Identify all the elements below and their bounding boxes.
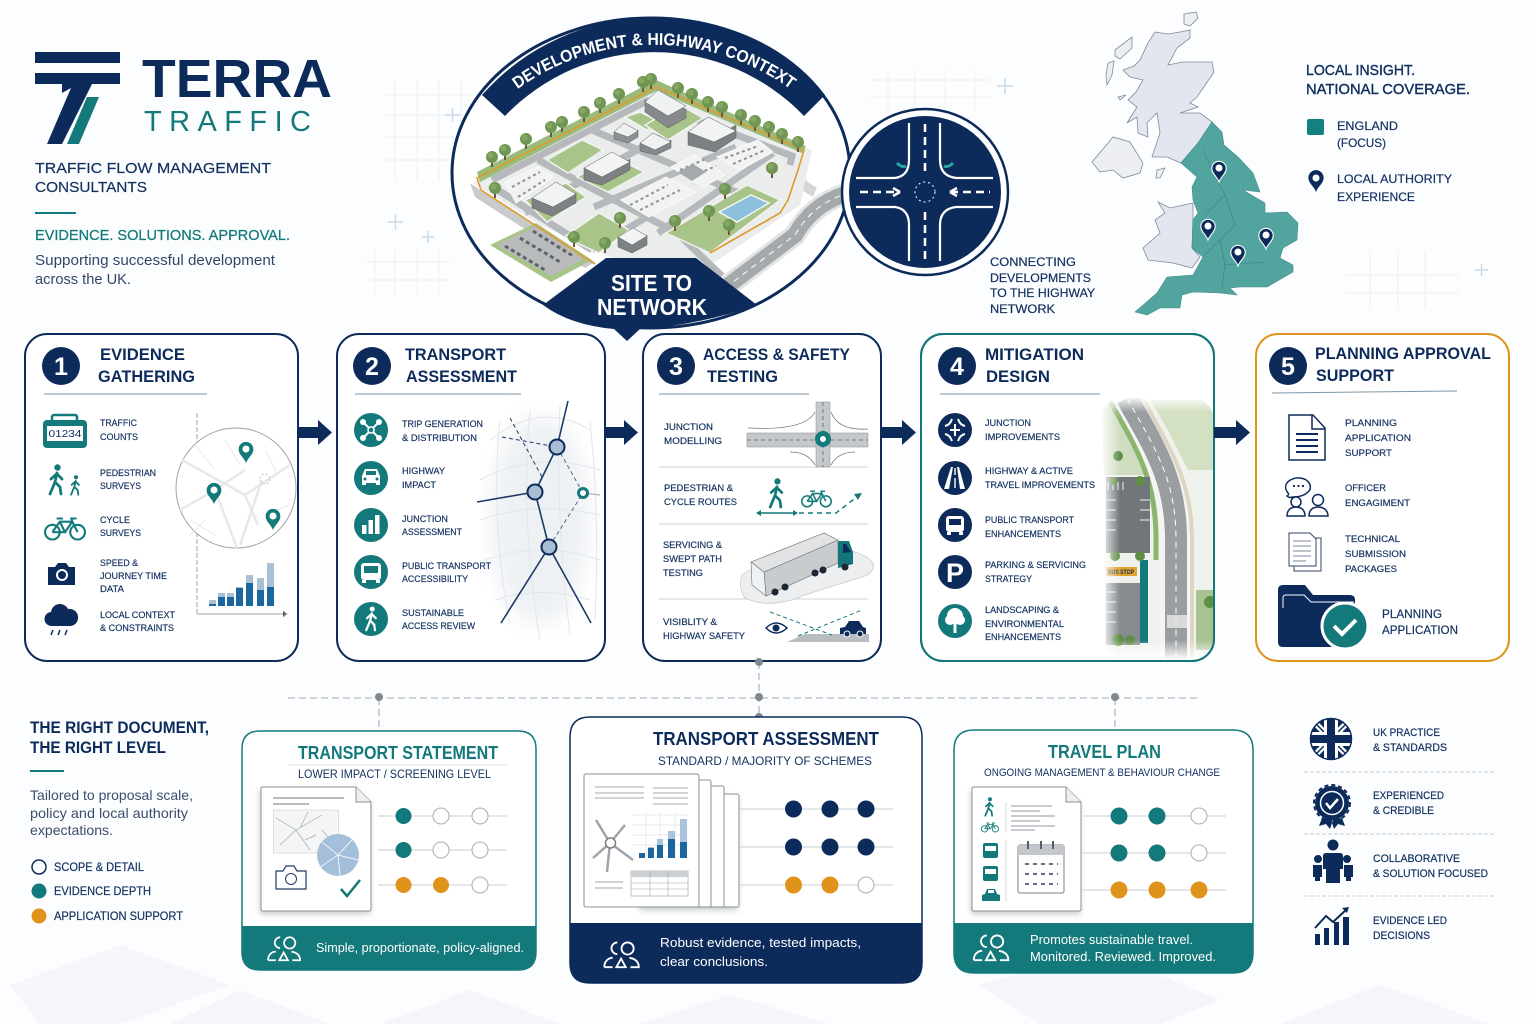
item: landscaping: ENHANCEMENTS	[985, 632, 1061, 642]
assessment footer: Robust evidence, tested impacts,	[660, 935, 861, 950]
map heading	[1306, 63, 1470, 98]
icon: parking	[938, 555, 972, 589]
item: public transport accessibility: PUBLIC TRANSPORT	[402, 561, 491, 571]
item: sustainable access: SUSTAINABLE	[402, 608, 464, 618]
map heading: LOCAL INSIGHT.	[1306, 63, 1415, 79]
heading 3: ACCESS & SAFETY	[703, 345, 851, 364]
badge 5: 5	[1281, 353, 1295, 381]
item: local context: LOCAL CONTEXT	[100, 610, 175, 620]
logo: Terra Traffic	[35, 49, 332, 144]
item: planning application	[1382, 607, 1458, 637]
panel: transport assessment	[570, 717, 922, 983]
badge 4: 4	[950, 353, 964, 381]
Wales	[1143, 202, 1200, 268]
assessment heading: TRANSPORT ASSESSMENT	[653, 729, 879, 749]
site roads	[490, 101, 792, 276]
document level intro text: policy and local authority	[30, 805, 188, 821]
icon: bicycle	[45, 518, 85, 540]
item: trip generation	[402, 419, 483, 443]
assessment footer	[570, 923, 922, 983]
Northern Ireland	[1092, 137, 1143, 178]
travel plan heading: ONGOING MANAGEMENT & BEHAVIOUR CHANGE	[984, 767, 1220, 779]
item: local context	[100, 610, 175, 633]
statement document	[261, 787, 371, 911]
item: pedestrian surveys: PEDESTRIAN	[100, 468, 156, 478]
site boundary	[477, 87, 804, 253]
wordmark	[142, 49, 332, 138]
item: planning application: PLANNING	[1382, 607, 1442, 621]
tagline: EVIDENCE. SOLUTIONS. APPROVAL.	[35, 228, 290, 244]
item: trip generation: TRIP GENERATION	[402, 419, 483, 429]
buildings	[532, 90, 736, 253]
bar chart	[209, 563, 274, 606]
item: technical submission packages: PACKAGES	[1345, 564, 1397, 574]
rating legend: APPLICATION SUPPORT	[54, 909, 184, 923]
pool	[719, 195, 769, 222]
item: speed and journey time: JOURNEY TIME	[100, 571, 167, 581]
connector lines	[288, 658, 1198, 731]
item: visibility and highway safety: VISIBLITY &	[663, 617, 717, 627]
item: junction improvements: IMPROVEMENTS	[985, 432, 1060, 442]
decorative grid accents	[365, 70, 1488, 308]
item: junction modelling	[664, 422, 722, 446]
document level intro heading: THE RIGHT DOCUMENT,	[30, 719, 209, 737]
icon: highway	[938, 461, 972, 495]
item: planning application support: PLANNING	[1345, 418, 1397, 428]
item: local context: & CONSTRAINTS	[100, 623, 174, 633]
company descriptor: TRAFFIC FLOW MANAGEMENT	[35, 160, 271, 177]
heading 1: GATHERING	[98, 367, 195, 386]
England	[1135, 122, 1298, 315]
badge 5	[1269, 347, 1307, 385]
item: highway impact: HIGHWAY	[402, 466, 445, 476]
heading 2	[355, 345, 521, 394]
item: highway impact	[402, 466, 445, 490]
travel plan document	[972, 787, 1081, 911]
item: landscaping: LANDSCAPING &	[985, 605, 1059, 615]
statement ratings	[378, 808, 507, 893]
item: junction improvements: JUNCTION	[985, 418, 1031, 428]
panel: travel plan	[954, 730, 1253, 973]
icon: walker	[354, 602, 388, 636]
company descriptor	[35, 160, 271, 214]
connecting caption: DEVELOPMENTS	[990, 271, 1091, 285]
wordmark: TERRA	[142, 49, 332, 109]
junction diagram	[747, 402, 868, 467]
card 4: mitigation design	[921, 334, 1216, 661]
item: technical submission packages: SUBMISSION	[1345, 549, 1406, 559]
item: pedestrian and cycle routes: CYCLE ROUTES	[664, 497, 737, 507]
badge 2: 2	[365, 353, 379, 381]
connecting caption	[990, 255, 1095, 316]
heading 3	[659, 345, 851, 394]
rating legend: SCOPE & DETAIL	[54, 860, 144, 874]
icon: union flag	[1310, 718, 1352, 760]
arrow	[1214, 420, 1250, 445]
icon: parking: P	[946, 558, 964, 588]
item: collaborative: & SOLUTION FOCUSED	[1373, 868, 1488, 880]
item: pedestrian surveys	[100, 468, 156, 491]
item: landscaping: ENVIRONMENTAL	[985, 619, 1064, 629]
icon: approved folder	[1278, 585, 1368, 649]
item: pedestrian and cycle routes: PEDESTRIAN &	[664, 483, 733, 493]
item: traffic counts	[100, 418, 138, 442]
supporting statement	[35, 252, 276, 288]
assessment ratings	[740, 800, 893, 894]
logo mark	[35, 52, 120, 144]
heading 5	[1272, 344, 1491, 393]
travel plan ratings	[1083, 808, 1226, 898]
item: servicing and swept path: SERVICING &	[663, 540, 722, 550]
map legend: LOCAL AUTHORITY	[1337, 172, 1452, 186]
connecting caption: NETWORK	[990, 302, 1055, 316]
item: speed and journey time: SPEED &	[100, 558, 138, 568]
travel plan footer: Monitored. Reviewed. Improved.	[1030, 949, 1216, 964]
document level intro heading	[30, 719, 209, 772]
icon: bus	[354, 555, 388, 589]
rating legend: EVIDENCE DEPTH	[54, 884, 151, 898]
item: public transport enhancements: ENHANCEMENTS	[985, 529, 1061, 539]
item: servicing and swept path: TESTING	[663, 568, 703, 578]
banner: site to network	[543, 258, 757, 341]
swept path truck	[741, 533, 873, 603]
aerial road plan	[1100, 396, 1216, 660]
arrow	[298, 420, 332, 445]
statement heading: TRANSPORT STATEMENT	[298, 743, 498, 763]
heading 2: ASSESSMENT	[406, 367, 518, 386]
item: sustainable access	[402, 608, 475, 631]
item: junction assessment: JUNCTION	[402, 514, 448, 524]
item: planning application support	[1345, 418, 1411, 458]
connecting caption: TO THE HIGHWAY	[990, 286, 1095, 300]
UK map	[1092, 12, 1298, 315]
item: junction assessment: ASSESSMENT	[402, 527, 462, 537]
company descriptor: CONSULTANTS	[35, 179, 147, 196]
icon: traffic counter: 01234	[48, 428, 82, 440]
assessment heading	[653, 729, 879, 768]
assessment document stack	[584, 774, 739, 907]
travel plan footer	[954, 923, 1253, 973]
assessment heading: STANDARD / MAJORITY OF SCHEMES	[658, 754, 872, 768]
card 3: access and safety testing	[643, 334, 881, 661]
aerial road plan: BUS STOP	[1108, 570, 1134, 576]
trees	[486, 73, 804, 253]
item: technical submission packages: TECHNICAL	[1345, 534, 1400, 544]
map heading: NATIONAL COVERAGE.	[1306, 82, 1470, 98]
item: parking and servicing: STRATEGY	[985, 574, 1032, 584]
icon: junction improvements	[938, 413, 972, 447]
chart axes	[197, 413, 287, 617]
assessment footer: clear conclusions.	[660, 954, 768, 969]
item: public transport accessibility: ACCESSIBILITY	[402, 574, 468, 584]
junction roundel	[842, 109, 1008, 275]
item: traffic counts: COUNTS	[100, 432, 138, 442]
item: officer engagement: OFFICER	[1345, 483, 1386, 493]
map legend: EXPERIENCE	[1337, 190, 1415, 204]
icon: bars	[354, 508, 388, 542]
item: public transport enhancements	[985, 515, 1074, 539]
item: planning application support: APPLICATION	[1345, 433, 1411, 443]
banner: site to network: NETWORK	[597, 294, 707, 320]
icon: car	[354, 461, 388, 495]
item: UK practice: UK PRACTICE	[1373, 727, 1440, 739]
route diagram	[756, 478, 862, 516]
badge 4	[938, 347, 976, 385]
item: junction improvements	[985, 418, 1060, 442]
access road	[725, 160, 845, 288]
item: experienced: & CREDIBLE	[1373, 805, 1434, 817]
badge 2	[353, 347, 391, 385]
item: UK practice	[1373, 727, 1447, 754]
map legend: (FOCUS)	[1337, 136, 1386, 150]
item: pedestrian surveys: SURVEYS	[100, 481, 141, 491]
item: pedestrian and cycle routes	[664, 483, 737, 507]
badge 1: 1	[54, 353, 68, 381]
item: speed and journey time: DATA	[100, 584, 125, 594]
icon: tree	[938, 604, 972, 638]
item: cycle surveys	[100, 515, 141, 538]
item: technical submission packages	[1345, 534, 1406, 574]
item: servicing and swept path: SWEPT PATH	[663, 554, 722, 564]
rating legend	[32, 860, 184, 924]
card 1: evidence gathering	[25, 334, 298, 661]
item: experienced	[1373, 790, 1444, 817]
travel plan heading: TRAVEL PLAN	[1048, 742, 1161, 762]
connecting caption: CONNECTING	[990, 255, 1076, 269]
heading 4	[940, 345, 1100, 394]
document level intro text: Tailored to proposal scale,	[30, 787, 193, 803]
item: highway and active travel: TRAVEL IMPROVEMENTS	[985, 480, 1095, 490]
supporting statement: Supporting successful development	[35, 252, 276, 269]
statement heading: LOWER IMPACT / SCREENING LEVEL	[298, 767, 491, 781]
badge 1	[42, 347, 80, 385]
travel plan footer: Promotes sustainable travel.	[1030, 932, 1193, 947]
arrow	[605, 420, 638, 445]
item: officer engagement: ENGAGIMENT	[1345, 498, 1410, 508]
statement footer: Simple, proportionate, policy-aligned.	[316, 940, 524, 955]
item: highway and active travel	[985, 466, 1095, 490]
item: UK practice: & STANDARDS	[1373, 742, 1447, 754]
item: experienced: EXPERIENCED	[1373, 790, 1444, 802]
map legend: ENGLAND	[1337, 119, 1398, 133]
heading 1	[44, 345, 207, 394]
Scottish islands	[1106, 12, 1198, 178]
heading 2: TRANSPORT	[405, 345, 507, 364]
item: junction assessment	[402, 514, 462, 537]
item: trip generation: & DISTRIBUTION	[402, 433, 477, 443]
item: officer engagement	[1345, 483, 1410, 508]
item: visibility and highway safety	[663, 617, 745, 641]
item: speed and journey time	[100, 558, 167, 594]
item: evidence led: EVIDENCE LED	[1373, 915, 1447, 927]
heading 1: EVIDENCE	[100, 345, 185, 364]
card 5: planning approval support	[1256, 334, 1509, 661]
item: evidence led: DECISIONS	[1373, 930, 1430, 942]
heading 4: DESIGN	[986, 367, 1050, 386]
statement footer	[242, 926, 536, 970]
statement heading	[289, 743, 507, 781]
heading 5: SUPPORT	[1316, 366, 1395, 385]
item: evidence led	[1373, 915, 1447, 942]
visibility diagram	[766, 610, 869, 642]
icon: weather cloud	[44, 604, 78, 635]
item: highway impact: IMPACT	[402, 480, 436, 490]
background street pattern	[10, 945, 1490, 1024]
item: landscaping	[985, 605, 1064, 642]
item: servicing and swept path	[663, 540, 722, 578]
icon: traffic counter	[43, 415, 87, 448]
icon: team	[1313, 840, 1353, 883]
card 2: transport assessment	[337, 334, 605, 661]
item: collaborative: COLLABORATIVE	[1373, 853, 1460, 865]
map legend	[1307, 119, 1452, 204]
item: junction modelling: JUNCTION	[664, 422, 713, 432]
panel: transport statement	[242, 731, 536, 970]
document level intro text: expectations.	[30, 822, 113, 838]
item: public transport enhancements: PUBLIC TRANSPORT	[985, 515, 1074, 525]
site illustration oval	[450, 16, 850, 341]
arrow	[881, 420, 916, 445]
document level intro heading: THE RIGHT LEVEL	[30, 739, 166, 757]
item: cycle surveys: SURVEYS	[100, 528, 141, 538]
heading 5: PLANNING APPROVAL	[1315, 344, 1491, 363]
icon: pedestrians	[50, 464, 79, 495]
document level intro text	[30, 787, 193, 838]
map circle with pins	[176, 428, 296, 548]
icon: camera	[48, 563, 75, 585]
heading 3: TESTING	[707, 367, 778, 386]
badge 3	[657, 347, 695, 385]
item: highway and active travel: HIGHWAY & ACTIVE	[985, 466, 1073, 476]
item: collaborative	[1373, 853, 1488, 880]
item: cycle surveys: CYCLE	[100, 515, 130, 525]
banner: development and highway context	[482, 20, 825, 116]
item: junction modelling: MODELLING	[664, 436, 722, 446]
heading 4: MITIGATION	[985, 345, 1084, 364]
location pins	[1201, 161, 1273, 266]
item: planning application support: SUPPORT	[1345, 448, 1392, 458]
icon: submission packs	[1289, 533, 1321, 571]
item: parking and servicing	[985, 560, 1086, 584]
wordmark: TRAFFIC	[144, 106, 311, 138]
icon: officer engagement	[1286, 478, 1328, 516]
icon: growth chart	[1315, 907, 1349, 945]
network map	[477, 401, 600, 640]
site ground	[473, 84, 812, 262]
parking area	[490, 223, 592, 282]
travel plan heading	[984, 742, 1220, 779]
site plots	[505, 105, 780, 253]
supporting statement: across the UK.	[35, 271, 131, 288]
item: public transport accessibility	[402, 561, 491, 584]
item: traffic counts: TRAFFIC	[100, 418, 137, 428]
icon: rosette	[1314, 785, 1350, 829]
banner: development and highway context: DEVELOPMENT & HIGHWAY CONTEXT	[512, 33, 798, 89]
Scotland	[1123, 30, 1214, 163]
item: planning application: APPLICATION	[1382, 623, 1458, 637]
icon: public transport	[938, 508, 972, 542]
badge 3: 3	[669, 353, 683, 381]
item: parking and servicing: PARKING & SERVICING	[985, 560, 1086, 570]
icon: trip generation	[354, 413, 388, 447]
icon: planning document	[1289, 415, 1325, 460]
item: visibility and highway safety: HIGHWAY SAFETY	[663, 631, 745, 641]
item: sustainable access: ACCESS REVIEW	[402, 621, 475, 631]
banner: site to network: SITE TO	[611, 270, 692, 296]
